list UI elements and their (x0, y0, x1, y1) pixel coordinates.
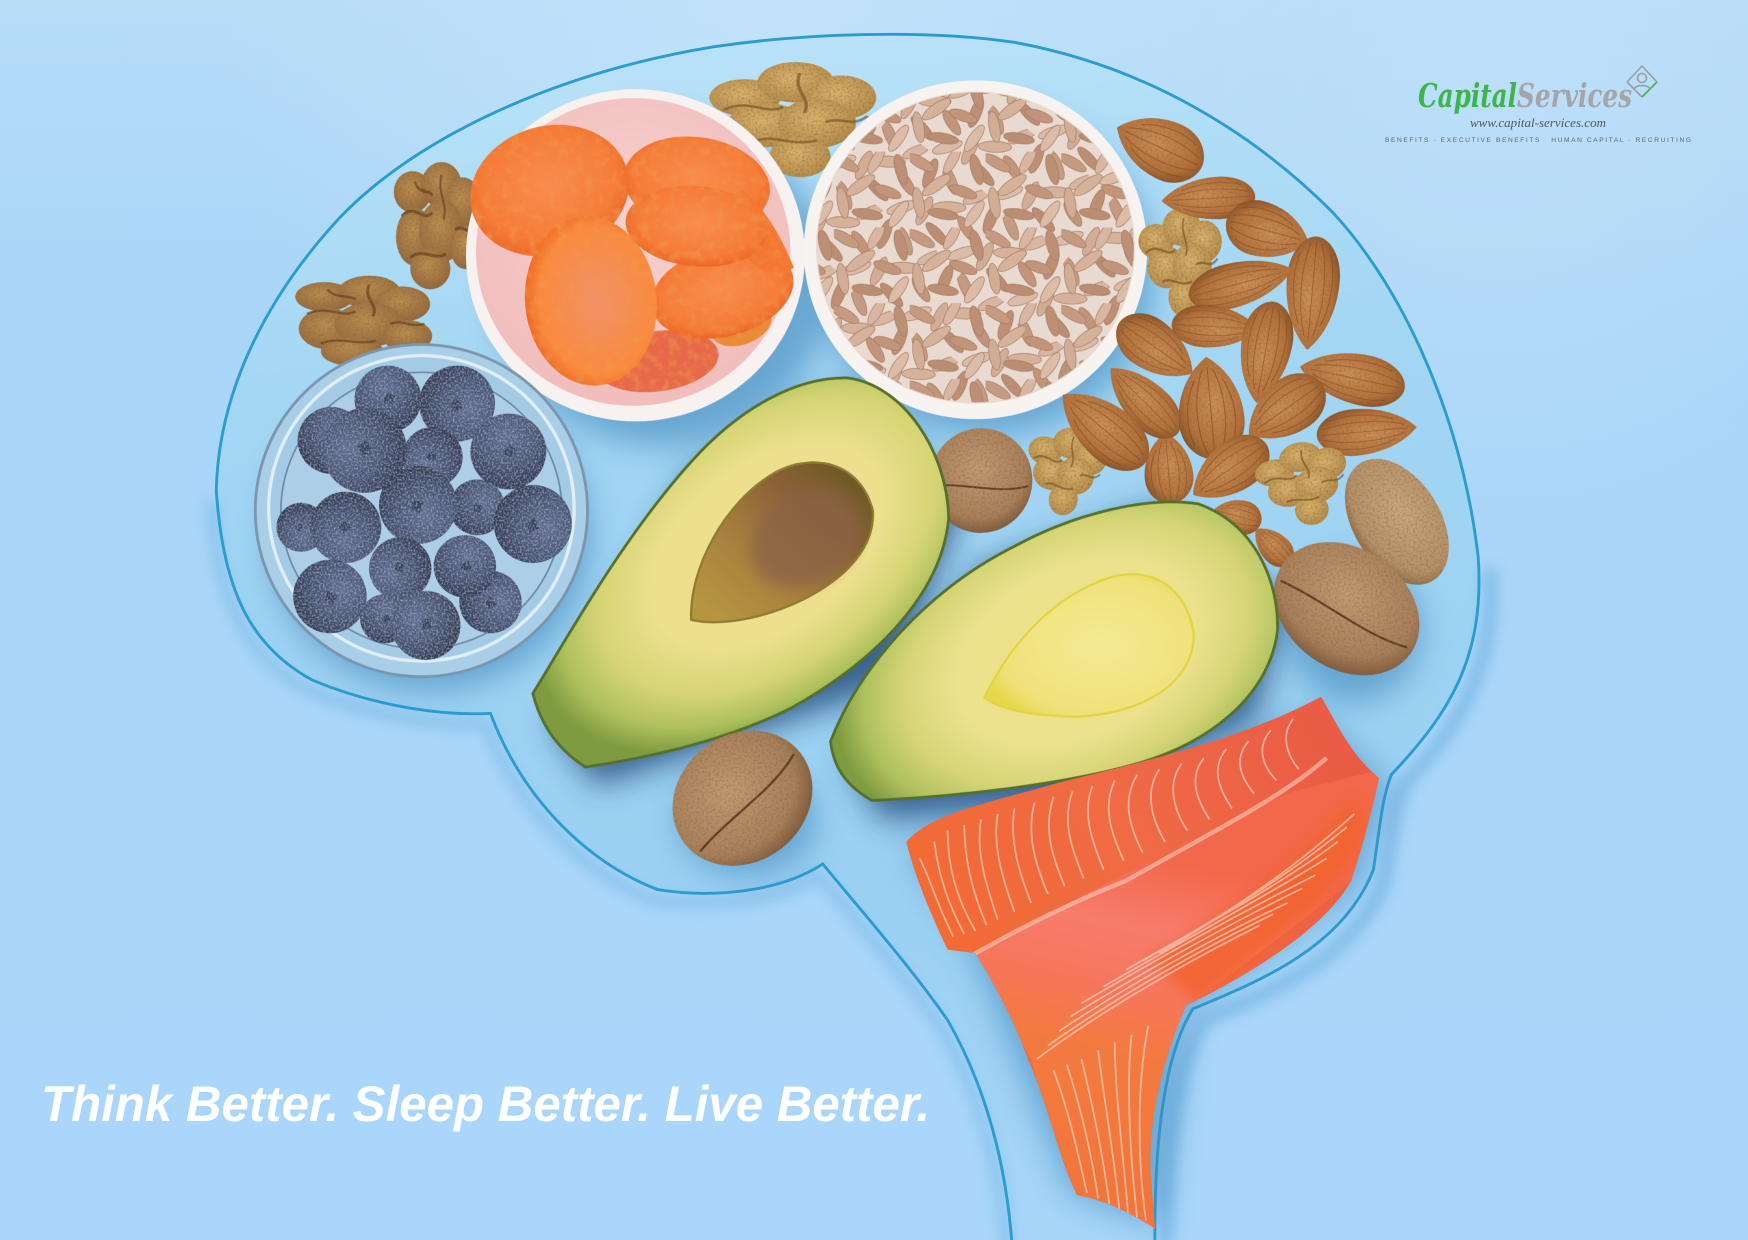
grain bowl (804, 80, 1147, 419)
logo wordmark: Capital (1418, 76, 1517, 115)
logo url: www.capital-services.com (1470, 115, 1606, 130)
blueberry glass bowl (255, 344, 588, 677)
brain interior and outline (212, 34, 1490, 1240)
brain illustration (212, 34, 1490, 1240)
salmon fat stripes (920, 719, 1354, 1221)
almonds and nuts cluster (921, 100, 1470, 703)
logo wordmark: Services (1517, 76, 1632, 115)
logo services line: BENEFITS · EXECUTIVE BENEFITS HUMAN CAPITAL · RECRUITING (1385, 137, 1691, 144)
logo icon: person in diamond (1627, 66, 1657, 97)
avocado stone (691, 462, 878, 622)
logo wordmark (1418, 76, 1632, 115)
logo: Capital Services (1385, 66, 1691, 144)
walnut kernels, upper left (295, 62, 876, 366)
avocado hollow (984, 574, 1194, 717)
right avocado half with hollow (831, 502, 1278, 800)
apricots (455, 107, 803, 400)
left avocado half with stone (533, 378, 949, 767)
salmon fillet (906, 697, 1382, 1237)
ground shadows (268, 111, 1421, 1226)
whole walnut bottom (645, 703, 840, 894)
tagline: Think Better. Sleep Better. Live Better. (41, 1076, 930, 1132)
blueberries (270, 352, 588, 670)
apricot bowl (455, 89, 805, 421)
